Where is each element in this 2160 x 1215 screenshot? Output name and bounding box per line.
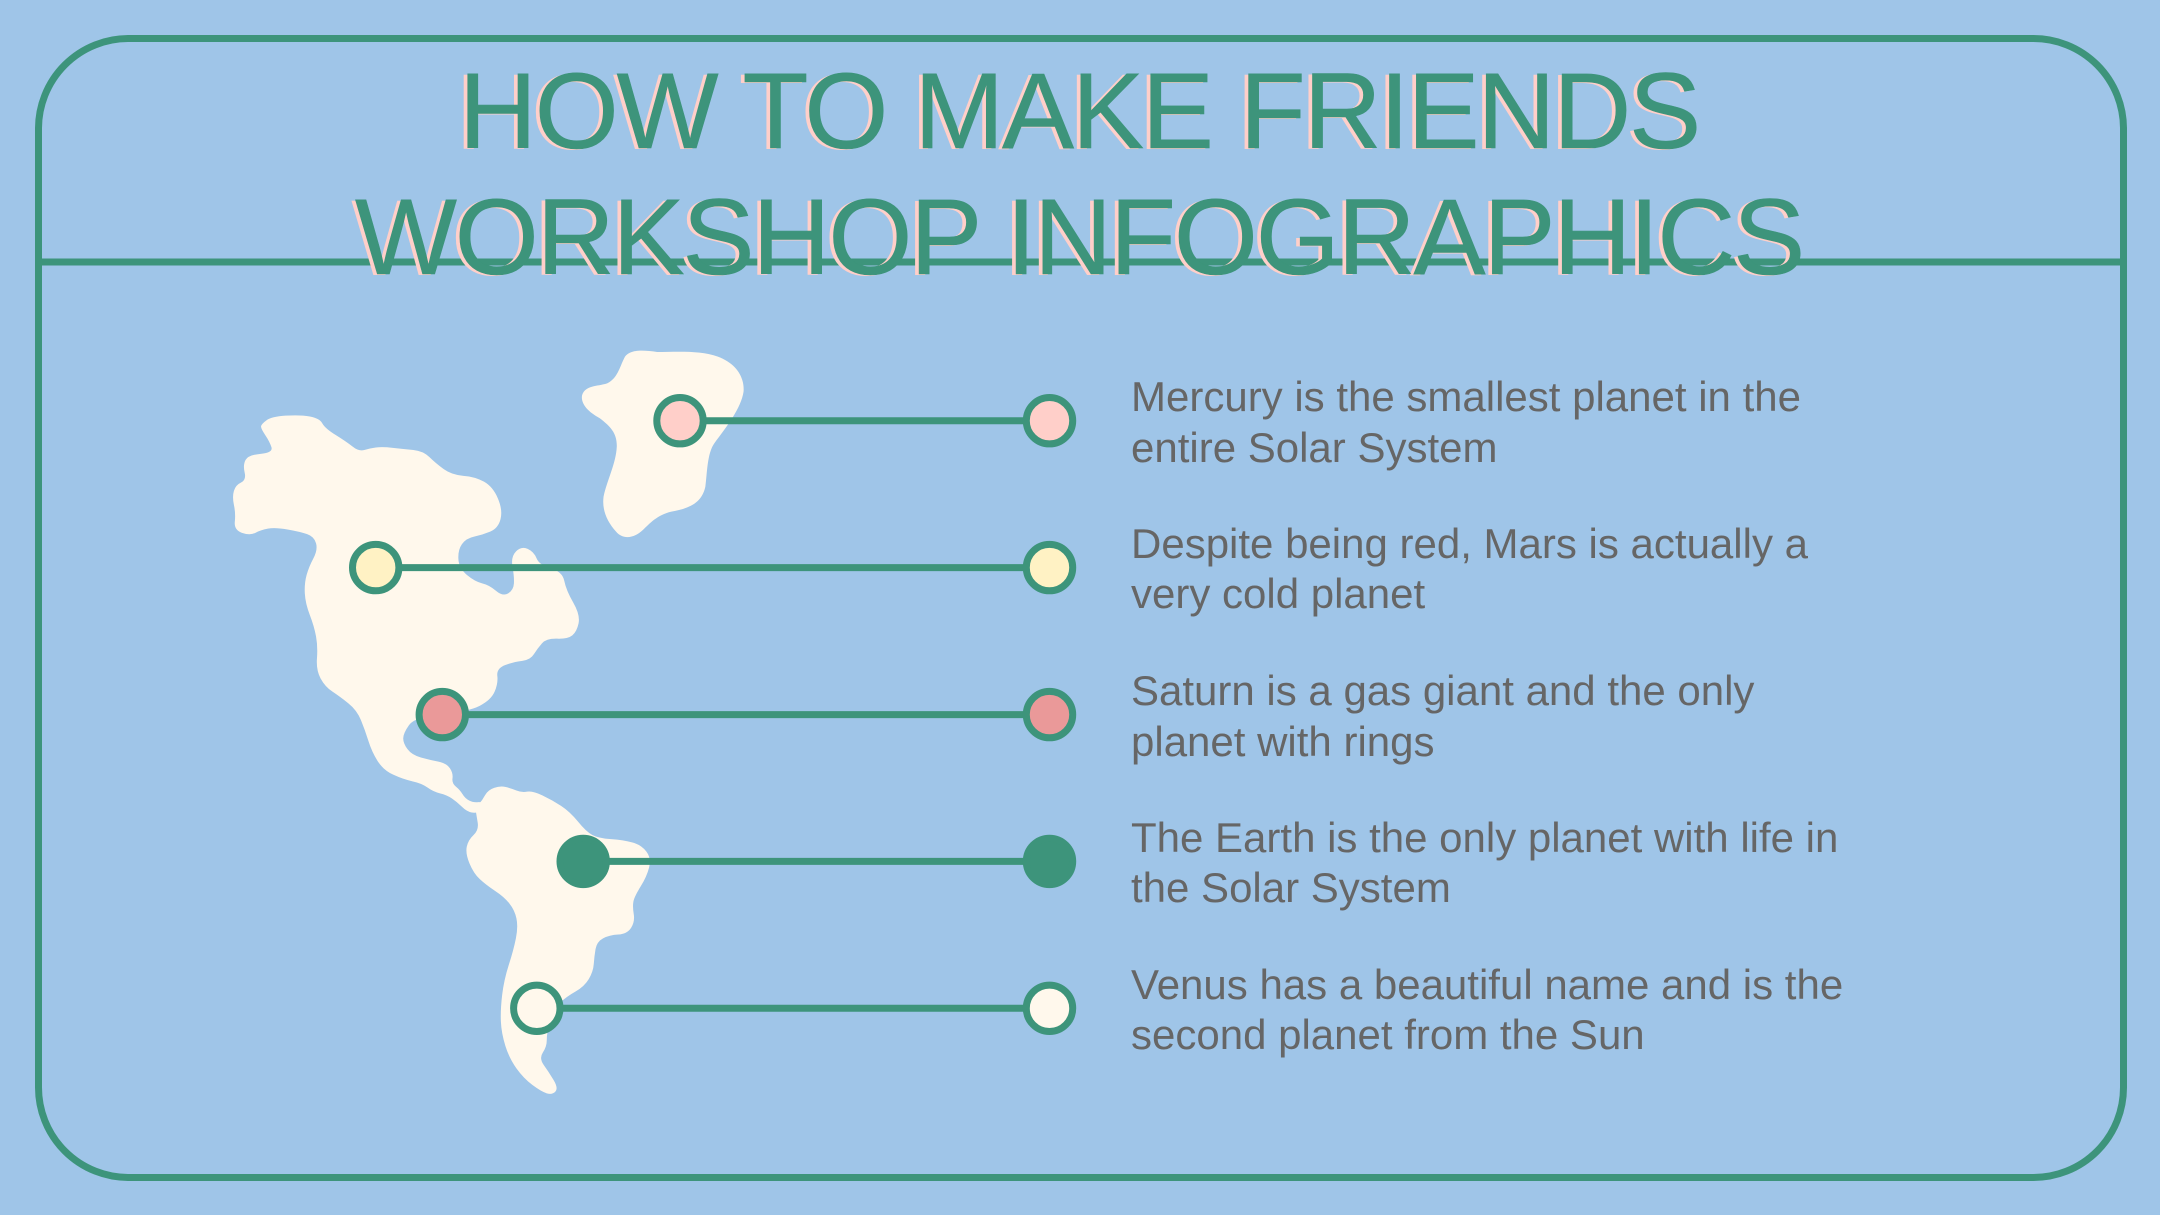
connector: Mars: [352, 544, 1073, 591]
connector: Mercury: [657, 398, 1073, 444]
landmass: Greenland: [582, 351, 744, 537]
connector: Saturn: [419, 691, 1073, 738]
text: Saturn: [1131, 667, 1754, 765]
text: Saturn: Saturn is a gas giant and the only: [1131, 667, 1754, 714]
landmass: North and Central America: [233, 415, 579, 813]
text: Mars: Despite being red, Mars is actually a: [1131, 520, 1808, 567]
map of the Americas: [233, 351, 744, 1094]
title: WORKSHOP INFOGRAPHICS: [355, 176, 1803, 297]
text: Mercury: Mercury is the smallest planet in the: [1131, 373, 1801, 420]
text: Earth: the Solar System: [1131, 864, 1451, 911]
text: Mercury: entire Solar System: [1131, 424, 1497, 471]
text: Mars: very cold planet: [1131, 570, 1425, 617]
text: Venus: [1131, 961, 1843, 1058]
text: Venus: Venus has a beautiful name and is the: [1131, 961, 1843, 1008]
text: Earth: The Earth is the only planet with life in: [1131, 814, 1838, 861]
title: [352, 50, 1803, 297]
text: Saturn: planet with rings: [1131, 718, 1434, 765]
connector: Earth: [560, 838, 1073, 885]
text: Venus: second planet from the Sun: [1131, 1011, 1645, 1058]
landmass: South America: [466, 786, 650, 1094]
title: HOW TO MAKE FRIENDS: [459, 50, 1699, 171]
text: Mercury: [1131, 373, 1801, 471]
text: Mars: [1131, 520, 1808, 617]
connector: Venus: [514, 985, 1073, 1032]
text: Earth: [1131, 814, 1838, 911]
